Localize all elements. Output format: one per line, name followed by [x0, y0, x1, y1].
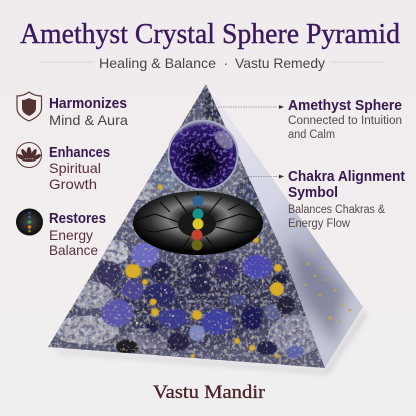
callout: chakra alignment symbol: Chakra Alignment — [288, 169, 405, 185]
base shadow — [52, 310, 368, 374]
amethyst sphere — [168, 120, 238, 190]
callout: amethyst sphere: Connected to Intuition — [288, 115, 402, 127]
callout: chakra alignment symbol: Symbol — [288, 185, 338, 201]
gems — [97, 243, 304, 358]
brand name: Vastu Mandir — [153, 383, 265, 403]
callout: amethyst sphere: Amethyst Sphere — [288, 98, 402, 114]
callout: amethyst sphere — [288, 98, 402, 141]
callout: amethyst sphere: and Calm — [288, 129, 335, 141]
callout arrow: sphere — [218, 105, 284, 109]
callout: chakra alignment symbol — [288, 169, 405, 230]
subtitle with rules: · — [224, 55, 228, 71]
benefit: restores: Restores — [49, 211, 106, 227]
icon: chakra column — [16, 208, 43, 236]
gold flecks — [125, 184, 284, 358]
icon: lotus — [16, 142, 42, 168]
benefit: restores: Balance — [49, 242, 98, 258]
benefit: enhances: Spiritual — [49, 160, 101, 176]
callout: chakra alignment symbol: Balances Chakras & — [288, 204, 385, 216]
pyramid illustration — [40, 80, 368, 375]
benefit: harmonizes — [17, 92, 128, 128]
front face — [48, 84, 325, 368]
benefit: restores — [16, 208, 106, 258]
callout: chakra alignment symbol: Energy Flow — [288, 218, 351, 230]
subtitle with rules: Vastu Remedy — [235, 55, 325, 71]
chakra alignment symbol — [133, 191, 263, 255]
benefit: enhances — [16, 142, 110, 192]
benefit: harmonizes: Mind & Aura — [49, 112, 128, 128]
benefit: enhances: Growth — [49, 176, 97, 192]
subtitle with rules — [40, 55, 383, 71]
callout arrow: chakra — [238, 174, 284, 178]
benefit: enhances: Enhances — [49, 145, 110, 161]
subtitle with rules: Healing & Balance — [99, 55, 216, 71]
icon: shield — [17, 92, 42, 121]
title: Amethyst Crystal Sphere Pyramid — [20, 18, 400, 50]
benefit: harmonizes: Harmonizes — [49, 96, 127, 112]
benefit: restores: Energy — [49, 227, 93, 243]
right face — [206, 84, 363, 368]
chakra dots — [192, 196, 204, 250]
gem glints — [108, 264, 227, 324]
